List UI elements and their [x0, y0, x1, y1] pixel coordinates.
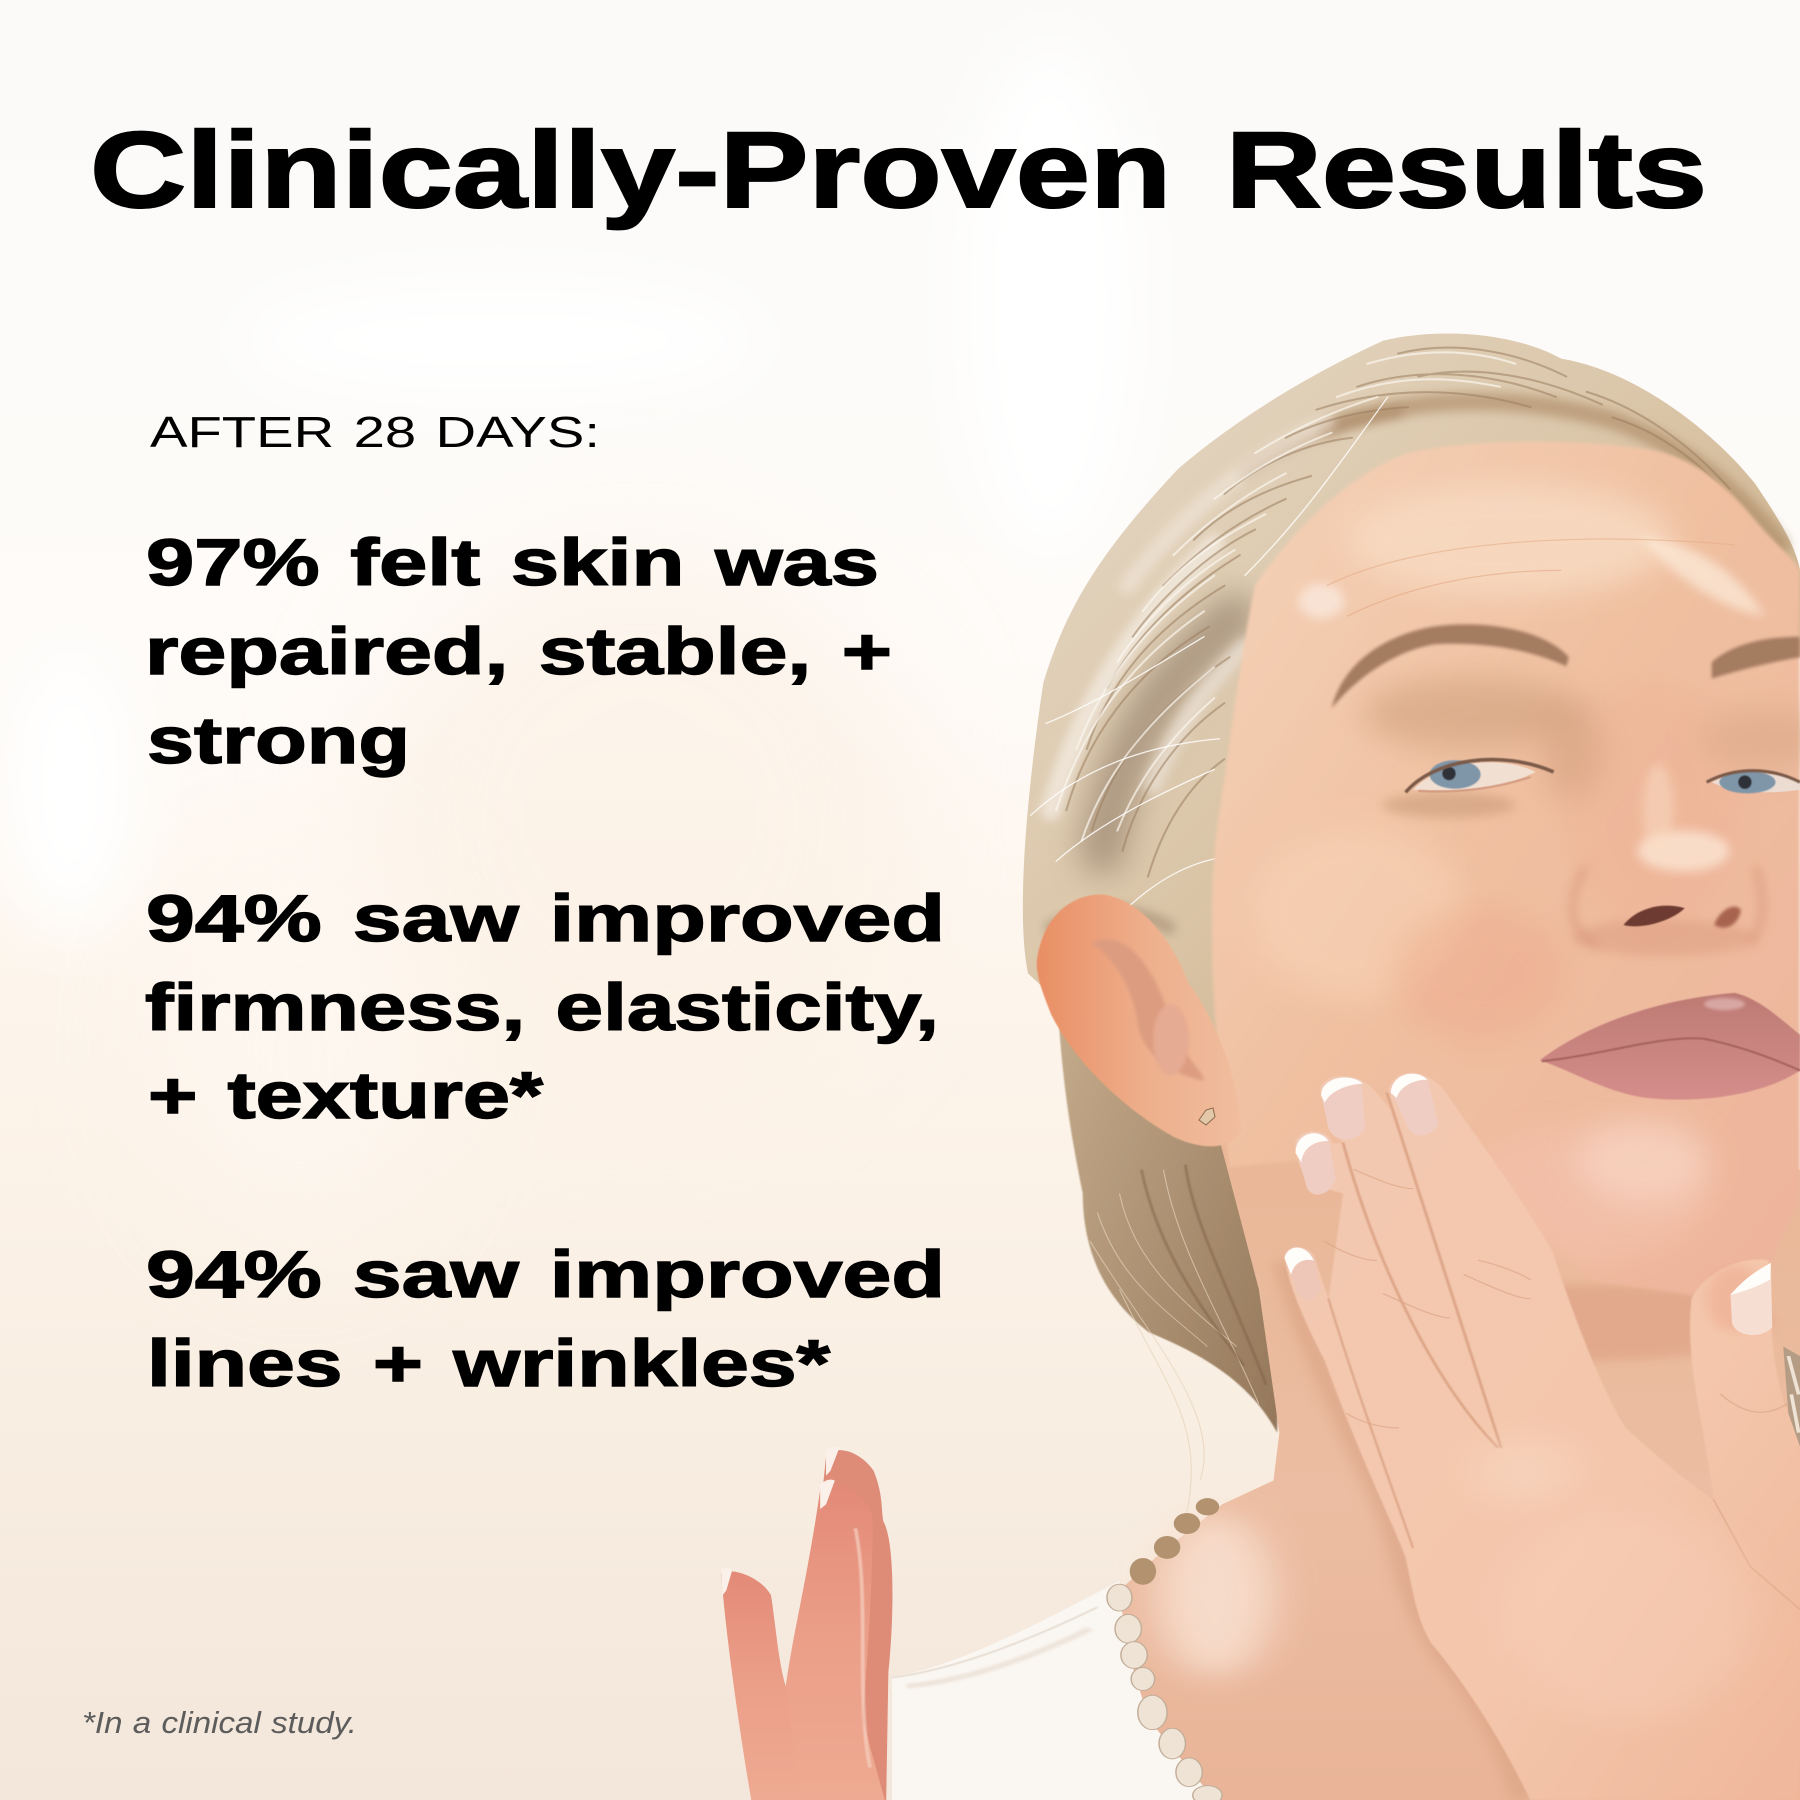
eye: right	[1707, 771, 1800, 793]
hand shadow on neck	[1284, 1260, 1523, 1800]
raised hand	[721, 1447, 892, 1800]
footnote: *In a clinical study.	[82, 1705, 357, 1740]
title: Clinically-Proven Results	[90, 109, 1707, 230]
lace trim	[1107, 1498, 1222, 1800]
lips	[1540, 993, 1800, 1100]
stat: 97% repaired: strong	[147, 703, 410, 777]
hair	[1023, 333, 1800, 1116]
neck and chest	[1119, 1122, 1800, 1800]
stat: 94% lines	[146, 1237, 945, 1400]
subheading: AFTER 28 DAYS:	[150, 408, 600, 457]
stat: 94% firmness: 94% saw improved	[146, 881, 945, 955]
stat: 94% firmness: + texture*	[148, 1058, 543, 1132]
head and face	[1023, 333, 1800, 1299]
face skin	[1212, 442, 1800, 1299]
hand highlights	[1472, 1265, 1765, 1720]
stat: 94% firmness: firmness, elasticity,	[145, 970, 939, 1044]
hair bun	[1056, 811, 1281, 1519]
nose	[1571, 764, 1762, 956]
stat: 94% lines: 94% saw improved	[146, 1237, 945, 1311]
stat: 97% repaired: 97% felt skin was	[146, 525, 879, 599]
photo: woman applying serum	[721, 333, 1800, 1800]
stat: 97% repaired	[145, 525, 892, 777]
nails	[1284, 1073, 1772, 1335]
skin shading	[1250, 484, 1765, 1259]
earring	[1199, 1108, 1215, 1125]
hand on face	[1284, 1073, 1800, 1800]
finger creases	[1325, 1093, 1800, 1610]
fine strands	[1066, 348, 1750, 877]
stat: 97% repaired: repaired, stable, +	[145, 614, 892, 688]
ear	[1037, 894, 1241, 1146]
eye: left	[1406, 760, 1554, 792]
brows	[1332, 624, 1800, 708]
eye sockets	[1362, 678, 1800, 818]
dress	[892, 1581, 1222, 1800]
stat: 94% lines: lines + wrinkles*	[147, 1326, 830, 1400]
stat: 94% firmness	[145, 881, 945, 1132]
lace beside thumb	[1783, 1347, 1800, 1447]
